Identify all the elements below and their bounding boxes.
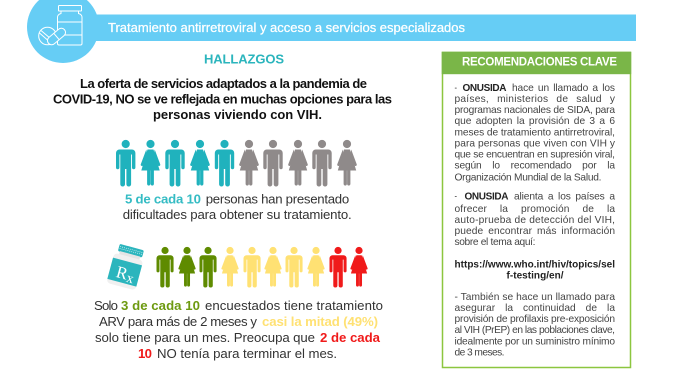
caption: ARV supply: 3 de cada 10 [121,298,200,313]
banner title: Tratamiento antirretroviral y acceso a servicios especializados [108,20,466,35]
intro statement: personas viviendo con VIH. [153,107,322,122]
icon: Rx bottle [106,243,146,290]
recommendation 1: países, ministerios de salud y [454,94,616,105]
intro statement: COVID-19, NO se ve reflejada en muchas opciones para las [53,92,392,106]
pictogram: 5 of 10 people [116,140,357,187]
recommendation 2: sobre el tema aquí: [454,237,536,248]
recommendation 2: puede encontrar más información [454,226,615,237]
recommendation 1: según lo recomendado por la [454,161,615,172]
recommendation 1 [454,83,616,184]
link: https://www.who.int/hiv/topics/sel [454,260,615,271]
icon: Rx bottle: R [114,262,130,284]
caption: ARV supply: Solo [94,298,118,313]
recommendation 1: que se encuentran en supresión viral, [454,150,615,160]
intro statement: La oferta de servicios adaptados a la pandemia de [80,76,367,91]
recommendation 1: para personas que viven con VIH y [454,138,616,149]
recommendation 3: de 3 meses. [454,348,504,358]
icon: Rx bottle: x [125,271,135,287]
recommendation 2 [454,191,615,248]
recommendation 1: hace un llamado a los [512,83,615,94]
recommendation 1: Organización Mundial de la Salud. [454,173,602,184]
panel header [442,52,631,74]
recommendation 3: - También se hace un llamado para [454,292,615,303]
recommendation 1: - [454,83,457,94]
intro statement [53,76,392,122]
recommendation 3: idealmente por un suministro mínimo [454,336,615,347]
heading: hallazgos: HALLAZGOS [204,52,284,67]
caption: ARV supply: encuestados tiene tratamiento [205,298,383,313]
recommendation 2: ONUSIDA [464,191,508,202]
caption: ARV supply: casi la mitad (49%) [262,314,378,329]
recommendation 3: al VIH (PrEP) en las poblaciones clave, [454,325,615,336]
recommendation 1: programas nacionales de SIDA, para [454,105,615,116]
recommendation 2: auto-prueba de detección del VIH, [454,215,615,226]
recommendation 1: ONUSIDA [462,83,506,94]
link: f-testing/en/ [506,270,564,282]
pictogram: ARV supply of 10 people [156,247,368,287]
caption: 5 de cada 10: dificultades para obtener su tratamiento. [123,207,352,222]
caption: 5 de cada 10 [123,191,352,222]
recommendation 2: - [454,191,457,202]
caption: 5 de cada 10: 5 de cada 10 [125,191,201,206]
caption: ARV supply: 10 [138,346,152,361]
recommendation 2: ofrecer la promoción de la [454,204,615,215]
recommendation 3: provisión de profilaxis pre-exposición [454,314,615,325]
caption: ARV supply [94,298,383,361]
recommendation 3 [454,292,615,358]
caption: 5 de cada 10: personas han presentado [206,191,349,206]
caption: ARV supply: ARV para más de 2 meses y [99,314,257,329]
icon: medicine jar and pills [39,6,82,46]
panel header: RECOMENDACIONES CLAVE [462,57,617,69]
link [454,260,615,282]
recommendation 3: asegurar la continuidad de la [454,303,615,314]
recommendation 1: meses de tratamiento antirretroviral, [454,127,615,138]
recommendation 1: que adopten la provisión de 3 a 6 [454,116,615,127]
caption: ARV supply: NO tenía para terminar el mes. [157,346,337,361]
panel: recomendaciones clave [442,52,631,367]
recommendation 2: alienta a los países a [514,191,615,202]
caption: ARV supply: 2 de cada [320,330,381,345]
caption: ARV supply: solo tiene para un mes. Preocupa que [95,330,315,345]
header banner [27,0,636,63]
